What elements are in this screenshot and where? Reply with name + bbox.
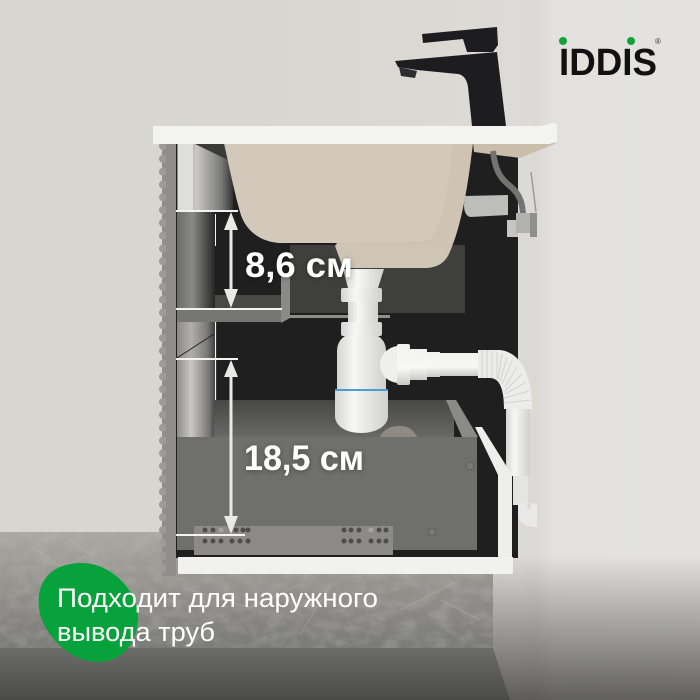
left side panel with scalloped edge — [162, 143, 176, 576]
white drawer side — [475, 427, 512, 574]
shelf — [176, 272, 290, 323]
floor — [0, 648, 510, 700]
label: 8,6 cm: 8,6 см — [245, 246, 353, 285]
panel: compartment above drawer — [177, 359, 217, 439]
siphon — [335, 269, 388, 433]
caption — [57, 583, 378, 647]
mixer valve and hose — [464, 151, 537, 237]
countertop — [153, 123, 557, 158]
panel: compartment under shelf — [177, 322, 217, 358]
bottom darkening on the wall — [493, 556, 700, 700]
lower drawer back — [214, 400, 478, 438]
cabinet interior — [176, 143, 518, 558]
arrow: 8,6 cm height — [224, 212, 238, 308]
panel: middle compartment left — [177, 211, 215, 309]
drain pipe — [380, 344, 537, 527]
green blob — [39, 563, 138, 662]
dimension lines — [176, 210, 245, 536]
caption: вывода труб — [57, 617, 215, 647]
caption: Подходит для наружного — [57, 583, 378, 613]
arrow: 18,5 cm height — [224, 360, 238, 534]
logo: IDDIS — [559, 42, 657, 84]
sink basin — [222, 143, 473, 268]
panel: top compartment left — [177, 143, 233, 211]
lower drawer front — [177, 437, 477, 550]
label: 18,5 cm: 18,5 см — [244, 439, 364, 478]
drawer runner — [194, 526, 393, 555]
faucet — [395, 27, 506, 126]
upper drawer back panel — [215, 245, 465, 318]
logo: ® — [655, 37, 661, 46]
stone floor band — [0, 532, 493, 648]
white cabinet bottom — [178, 557, 513, 574]
